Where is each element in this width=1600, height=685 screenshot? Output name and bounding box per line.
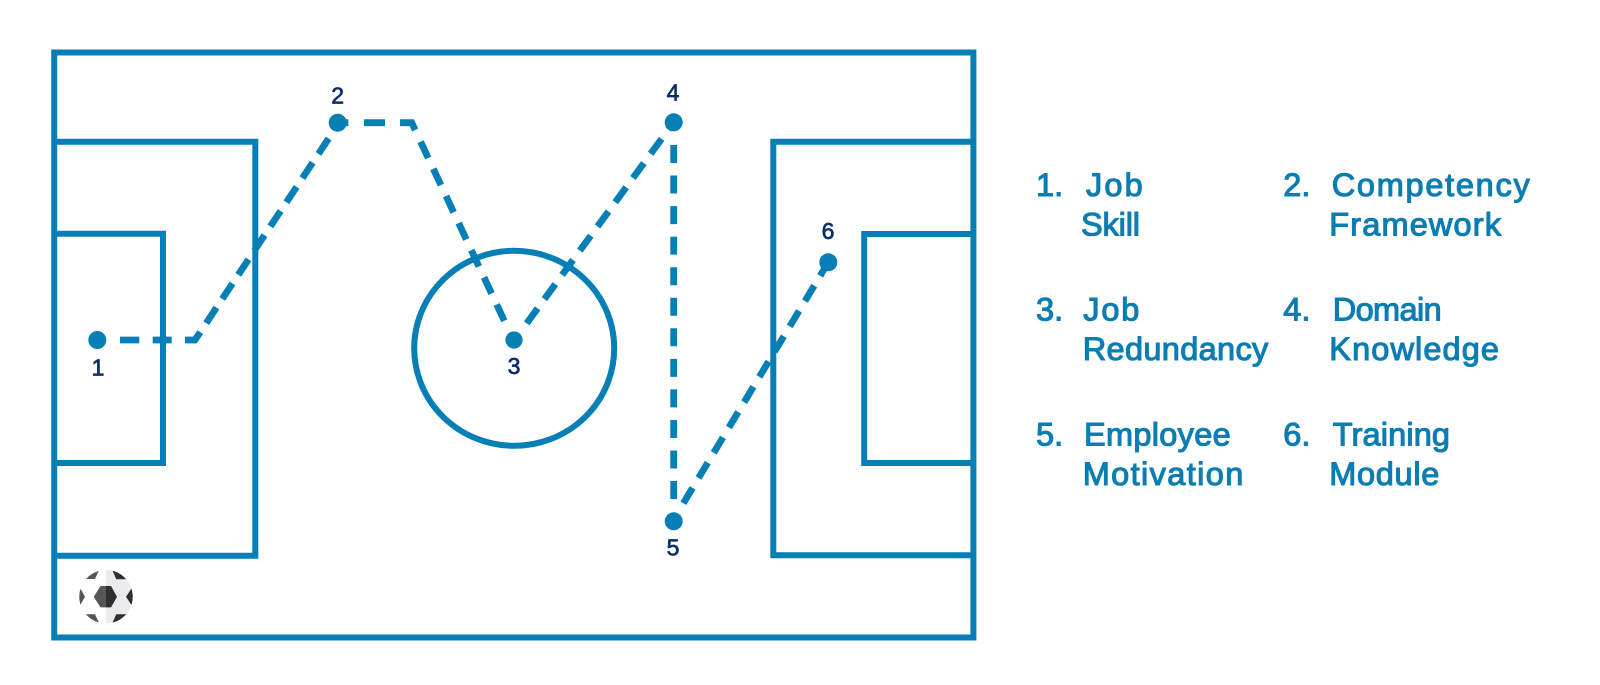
path from 2 to 3 [338, 123, 504, 321]
waypoint 3 [505, 331, 523, 379]
legend item 5 [1036, 416, 1243, 492]
legend item 4: 4. [1283, 292, 1310, 328]
right goal box [864, 234, 973, 463]
legend item 5: 5. [1036, 416, 1063, 452]
legend item 3: Job [1083, 292, 1139, 328]
legend item 6: Training [1333, 416, 1450, 452]
football pitch [54, 52, 973, 638]
waypoint 5 [665, 512, 683, 560]
waypoint 1: 1 [92, 355, 104, 381]
waypoint 3: 3 [508, 353, 520, 379]
legend item 2: Framework [1329, 206, 1502, 242]
icon: football [79, 570, 133, 624]
waypoint 6: 6 [822, 218, 834, 244]
waypoint 2: 2 [331, 82, 344, 108]
pitch outer boundary [54, 52, 973, 638]
legend item 2: 2. [1283, 167, 1310, 203]
path from 3 to 4 [527, 122, 674, 323]
waypoint 4: 4 [667, 80, 680, 106]
legend item 3: Redundancy [1083, 331, 1269, 367]
waypoint 4 [665, 80, 683, 131]
path from 4 to 5 [670, 145, 677, 500]
infographic canvas [51, 50, 1530, 640]
waypoint 6 [819, 218, 837, 271]
legend item 1 [1036, 167, 1143, 242]
legend [1036, 167, 1530, 492]
path from 5 to 6 [683, 262, 828, 503]
legend item 2: Competency [1332, 167, 1530, 203]
waypoint 5: 5 [667, 534, 679, 560]
legend item 4 [1283, 292, 1499, 367]
legend item 2 [1283, 167, 1530, 242]
legend item 6 [1283, 416, 1450, 492]
waypoint 1 [88, 331, 106, 381]
right penalty box [773, 142, 973, 555]
legend item 4: Knowledge [1329, 331, 1499, 367]
legend item 4: Domain [1333, 292, 1442, 328]
left penalty box [54, 142, 255, 556]
legend item 3: 3. [1036, 292, 1063, 328]
waypoint 2 [329, 82, 347, 132]
legend item 1: 1. [1036, 167, 1063, 203]
legend item 3 [1036, 292, 1269, 367]
legend item 5: Employee [1084, 416, 1231, 452]
centre circle [414, 251, 614, 446]
legend item 6: Module [1329, 456, 1439, 492]
legend item 1: Job [1086, 167, 1143, 203]
numbered waypoints [88, 80, 837, 560]
dashed play path [120, 122, 828, 503]
left goal box [54, 234, 163, 463]
path from 1 to 2 [120, 138, 329, 340]
legend item 6: 6. [1283, 416, 1310, 452]
legend item 5: Motivation [1083, 456, 1243, 492]
legend item 1: Skill [1081, 206, 1140, 242]
